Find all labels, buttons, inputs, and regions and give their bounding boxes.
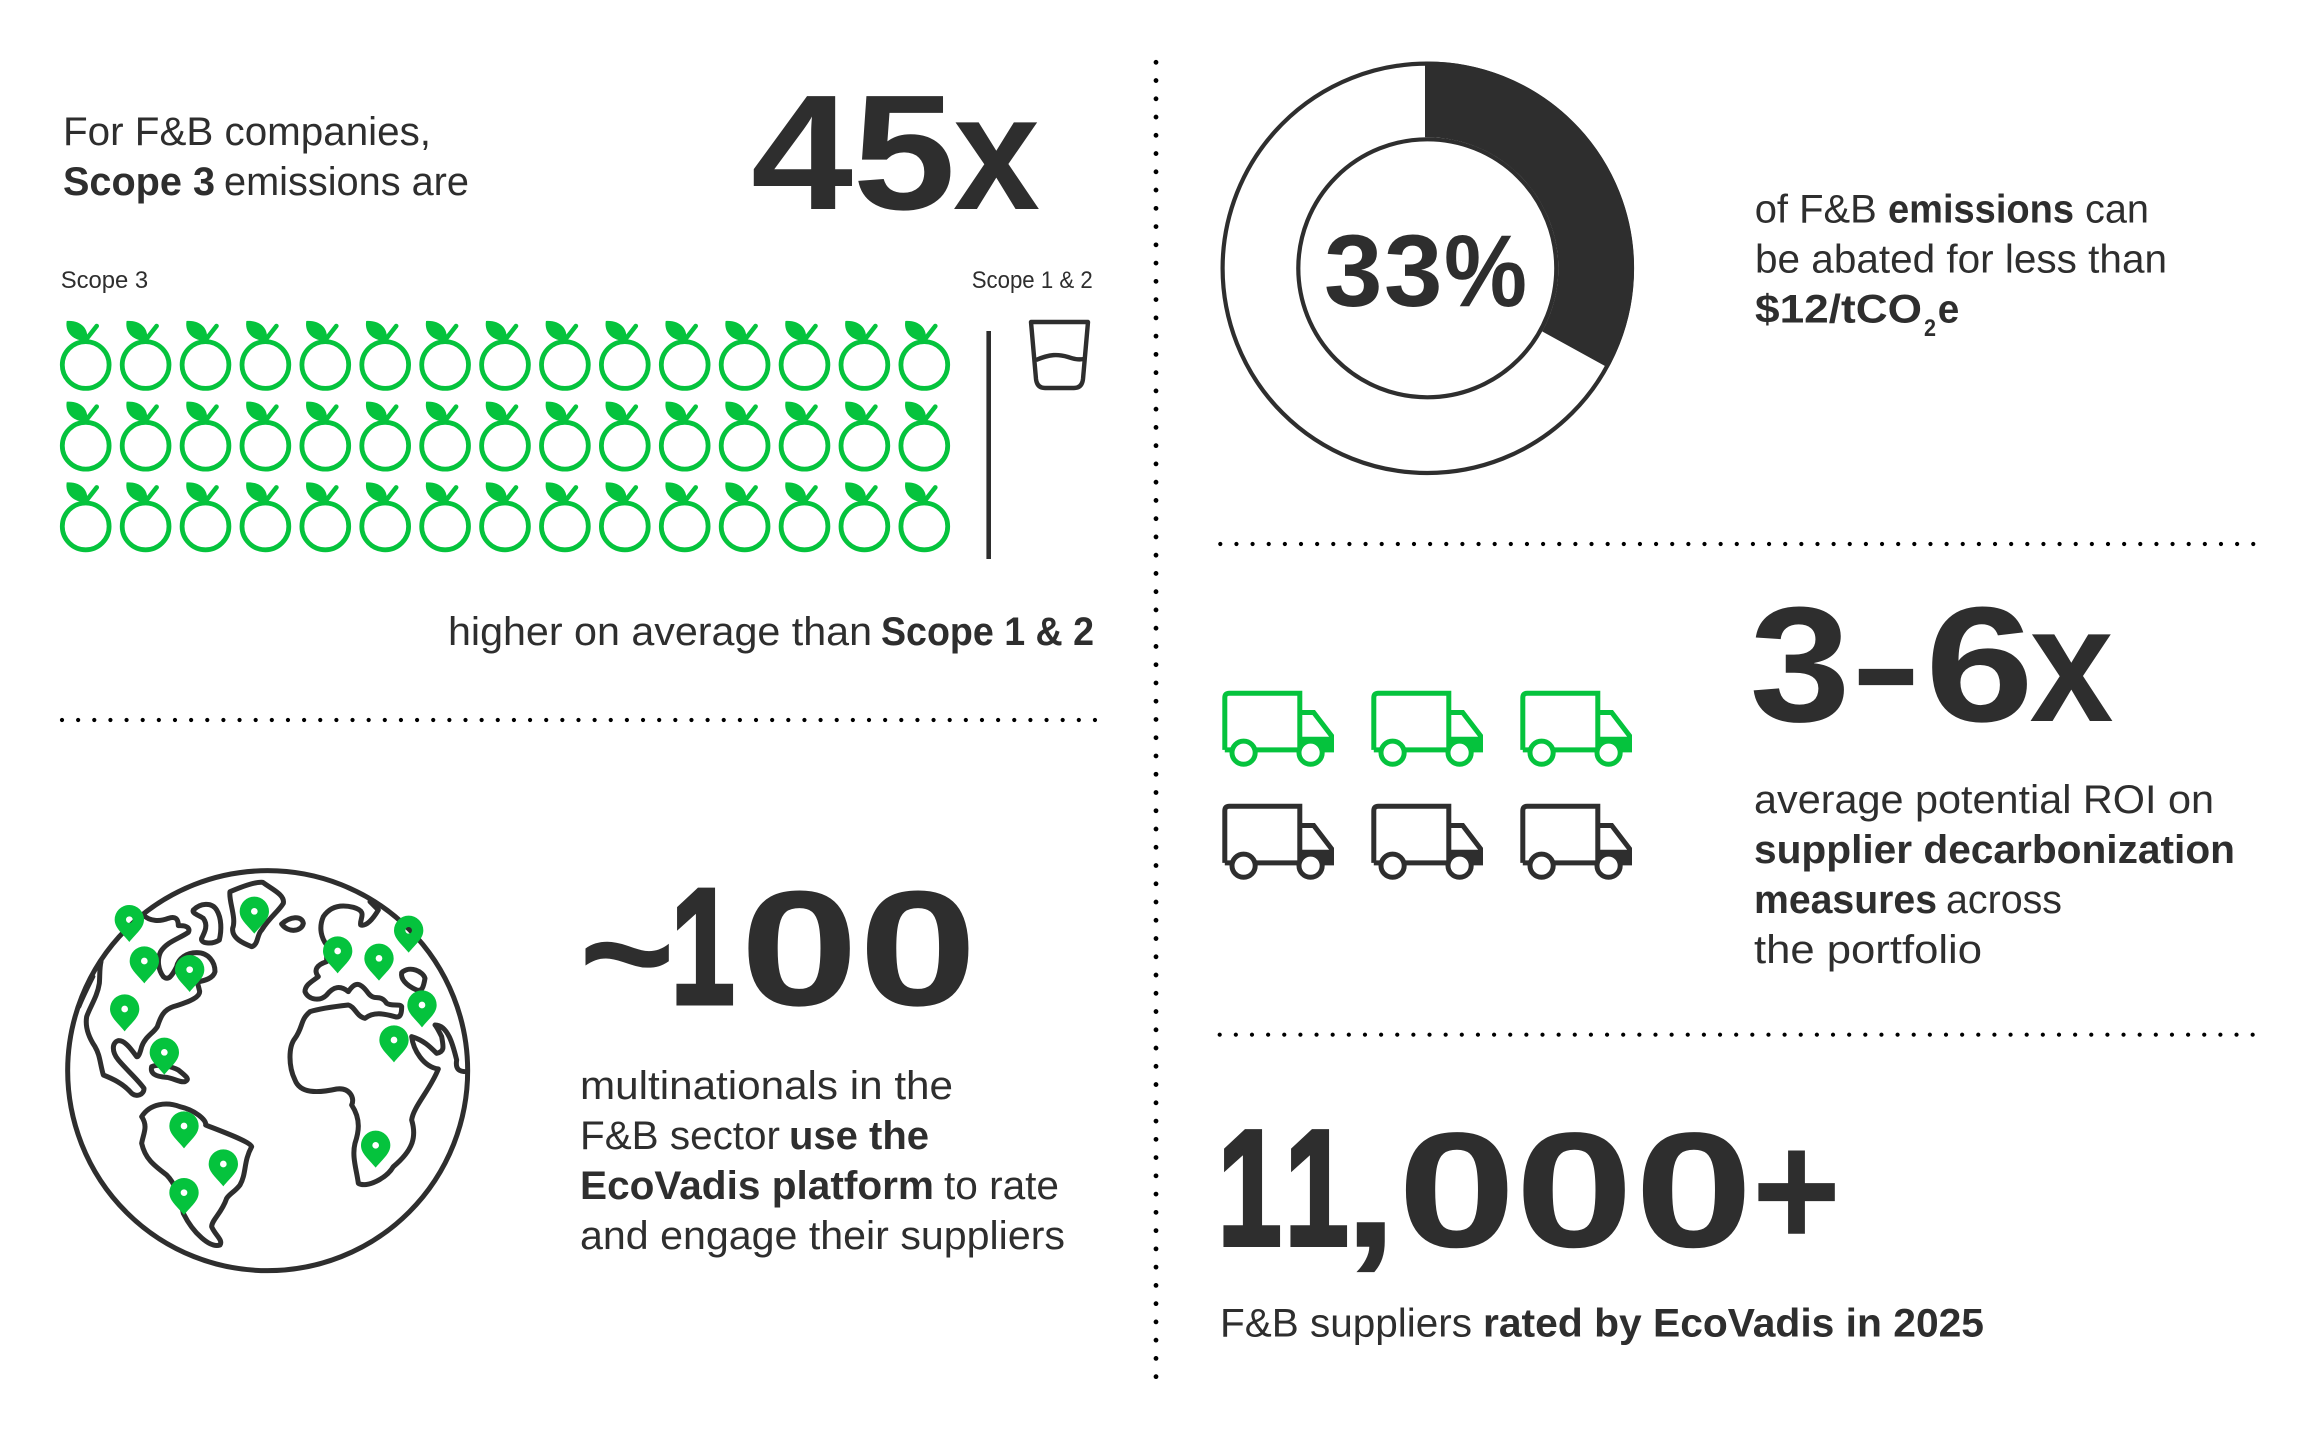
big number: 3–6x: 6 (1925, 573, 2034, 756)
big number: 11,000+: 0 (1634, 1099, 1753, 1282)
divider bar between apples and glass (986, 331, 991, 559)
big number: 3–6x: – (1856, 573, 1916, 756)
pictogram: 45 green apples (62, 321, 948, 550)
caption: higher on average: Scope 1 & 2 (881, 610, 1094, 654)
text block: abatement description: 2 (1924, 315, 1936, 342)
big number: ~100: ~ (579, 861, 675, 1044)
text block: ROI description: the portfolio (1754, 928, 1982, 972)
panel: multinationals (68, 855, 1065, 1271)
big number: 3–6x: 3 (1750, 573, 1850, 756)
label: scope 3: Scope 3 (61, 267, 148, 294)
text block: ROI description: across (1946, 878, 2062, 922)
caption: higher on average: higher on average than (448, 610, 872, 654)
text block: multinationals description (580, 1064, 1065, 1258)
icon: globe with location pins (68, 871, 468, 1271)
text block: suppliers rated description: F&B suppliers (1220, 1302, 1472, 1346)
text block: abatement description: of F&B (1755, 188, 1877, 232)
text block: multinationals description: F&B sector (580, 1114, 780, 1158)
text block: suppliers rated description (1220, 1302, 1984, 1346)
text block: abatement description: $12/tCO (1755, 288, 1922, 332)
big number: ~100: 0 (859, 857, 977, 1040)
panel: suppliers rated (1218, 1096, 1984, 1346)
text block: multinationals description: multinationals in the (580, 1064, 953, 1108)
panel: supplier ROI (1225, 573, 2235, 972)
big number: 11,000+: + (1752, 1099, 1841, 1282)
big number: 11,000+: 1 (1218, 1096, 1282, 1280)
big number: ~100: 0 (740, 857, 859, 1040)
text block: suppliers rated description: rated by EcoVadis in 2025 (1483, 1302, 1984, 1346)
big number: 3–6x: x (2030, 573, 2114, 756)
big number: 11,000+: 0 (1398, 1099, 1516, 1282)
big number: 45x: 4 (751, 61, 853, 244)
big number: 11,000+: , (1343, 1099, 1398, 1282)
big number: 45x: 5 (853, 61, 956, 244)
panel: scope 3 emissions comparison (61, 61, 1094, 654)
icon group: green trucks (1225, 693, 1632, 764)
big number: 11,000+: 1 (1285, 1096, 1348, 1280)
icon group: dark trucks (1225, 806, 1632, 877)
text block: abatement description: emissions (1888, 188, 2074, 232)
big number: 45x: x (953, 61, 1040, 244)
text block: ROI description: measures (1754, 878, 1937, 922)
big number: 33%: 3 (1384, 214, 1442, 328)
big number: 11,000+: 0 (1515, 1099, 1634, 1282)
text block: multinationals description: EcoVadis platform (580, 1164, 934, 1208)
text block: abatement description: e (1938, 288, 1959, 332)
heading: for F&B companies: emissions are (224, 160, 469, 204)
heading: for F&B companies (63, 110, 469, 204)
text block: ROI description: supplier decarbonization (1754, 828, 2235, 872)
icon: glass of water (1031, 322, 1088, 388)
text block: multinationals description: to rate (944, 1164, 1059, 1208)
text block: multinationals description: use the (789, 1114, 929, 1158)
text block: abatement description (1755, 188, 2167, 342)
donut chart: 33% (1223, 62, 1634, 473)
big number: ~100: 1 (671, 855, 734, 1038)
text block: ROI description (1754, 778, 2235, 972)
panel: 33% abatement (1223, 62, 2167, 473)
big number: 33%: 3 (1324, 214, 1382, 328)
text block: multinationals description: and engage their suppliers (580, 1214, 1065, 1258)
big number: 33%: % (1444, 214, 1527, 328)
text block: abatement description: can (2085, 188, 2149, 232)
text block: ROI description: average potential ROI on (1754, 778, 2214, 822)
heading: for F&B companies: Scope 3 (63, 160, 215, 204)
label: scope 1 and 2: Scope 1 & 2 (972, 267, 1093, 294)
text block: abatement description: be abated for less than (1755, 238, 2167, 282)
heading: for F&B companies: For F&B companies, (63, 110, 431, 154)
caption: higher on average (448, 610, 1094, 654)
